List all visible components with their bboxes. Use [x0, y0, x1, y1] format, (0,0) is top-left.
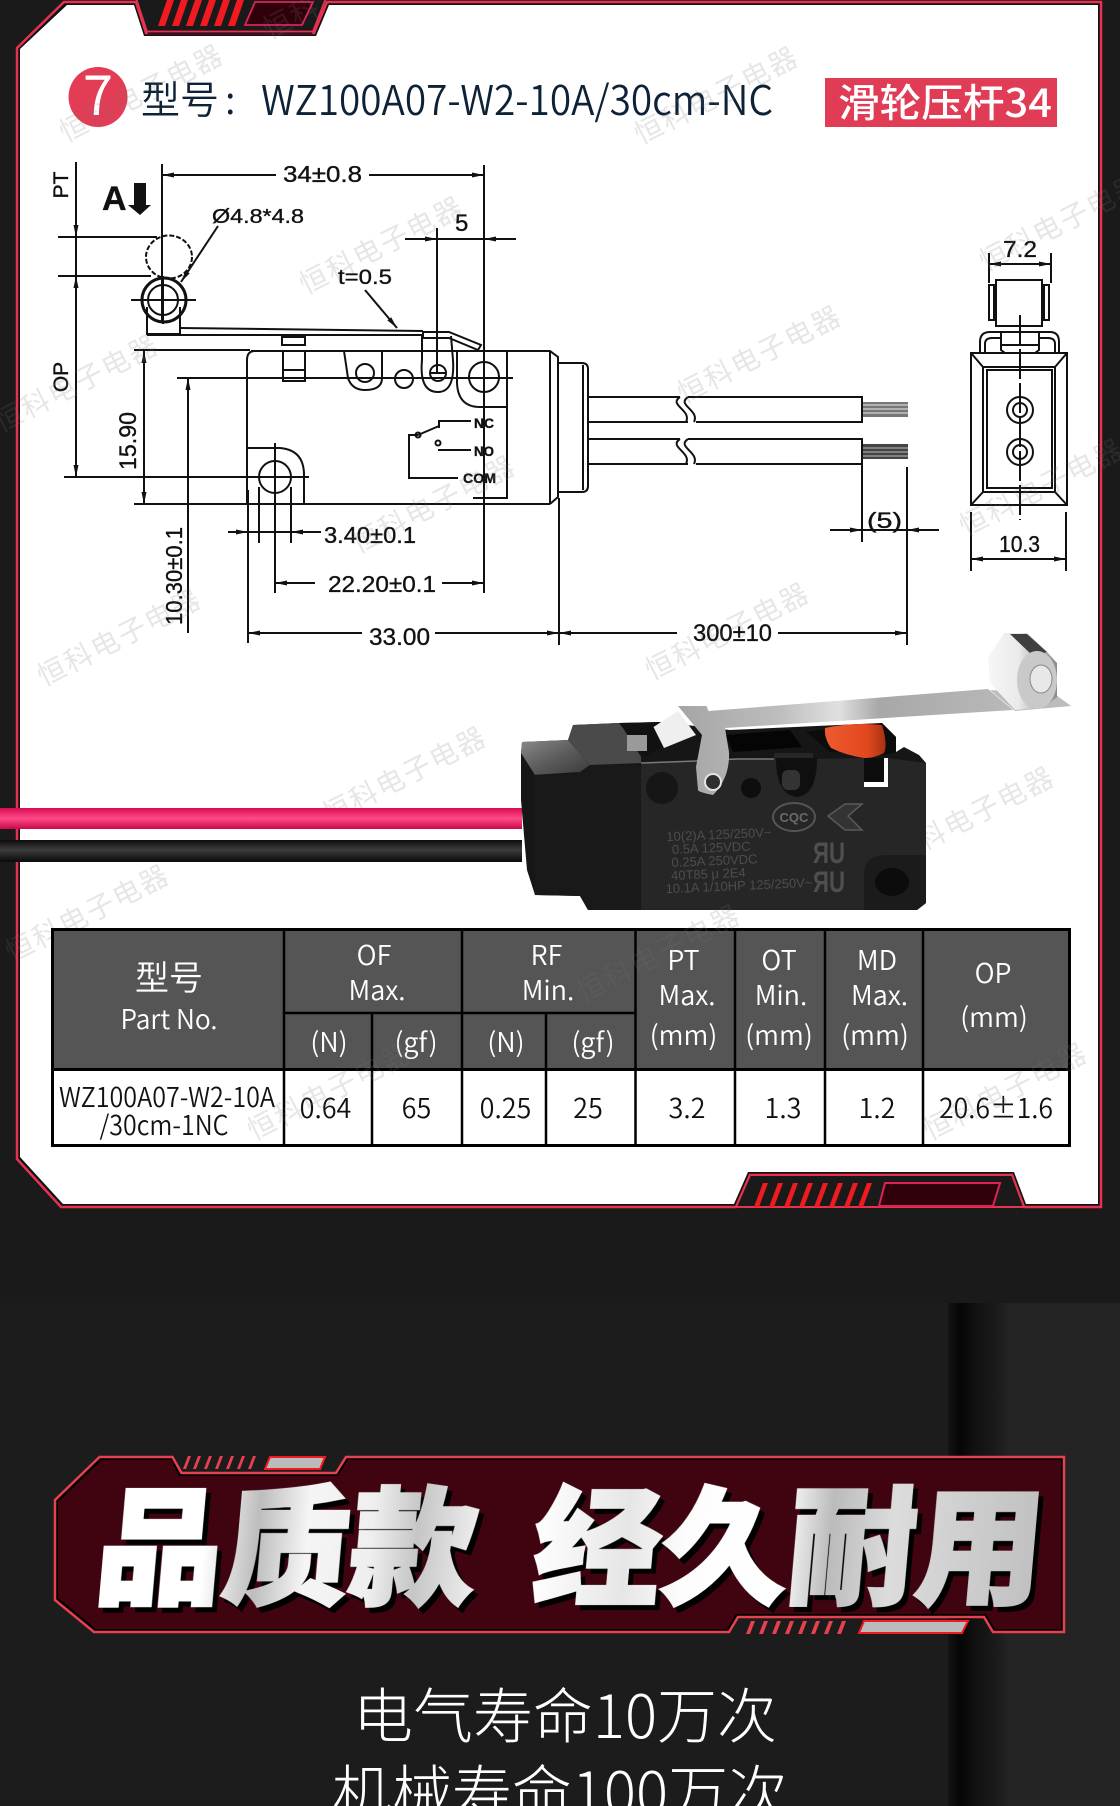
CQC mark [773, 803, 815, 831]
dimension: 10.3: 10.3 [999, 531, 1040, 557]
RF header: RF [531, 934, 562, 973]
lever pivot [705, 774, 721, 790]
wire strands [863, 402, 908, 459]
terminal labels: NC [474, 415, 494, 431]
red tag: roller lever 34: 滑轮压杆34 [838, 73, 1052, 129]
red wire [0, 808, 522, 829]
OF header [310, 934, 438, 1060]
watermarks under photo: 恒科电子电器 [627, 36, 805, 153]
data row: WZ100A07-W2-10A [59, 1076, 276, 1115]
dimension: t=0.5: t=0.5 [338, 266, 392, 289]
UR marks: ЯU [813, 837, 845, 870]
PT header: PT [667, 939, 700, 978]
dimension: 10.30±0.1: 10.30±0.1 [161, 527, 187, 625]
label: PT: PT [50, 171, 73, 198]
table grid [52, 929, 1070, 1146]
technical drawing: side view [50, 161, 939, 651]
data row [59, 1076, 1053, 1143]
EV certification mark [828, 804, 862, 830]
wires [589, 397, 862, 464]
data row: 20.6±1.6 [939, 1087, 1053, 1126]
panel: white specification frame [17, 2, 1101, 1207]
OF header: OF [357, 934, 391, 973]
dimension: 3.40±0.1: 3.40±0.1 [324, 522, 416, 548]
model text: 型号: [141, 70, 236, 126]
terminal labels [463, 415, 496, 486]
data row: 1.2 [859, 1087, 895, 1126]
banner: quality durable [55, 1445, 1064, 1634]
data row: 65 [402, 1087, 431, 1126]
part number header [120, 951, 218, 1037]
RF header: Min. [522, 969, 574, 1008]
data row: /30cm-1NC [100, 1104, 228, 1143]
watermarks under photo: 恒科电子电器 [315, 716, 493, 833]
banner frame [55, 1457, 1064, 1632]
RF header [487, 934, 615, 1060]
table body fill [51, 1069, 1071, 1147]
dimension: (5): (5) [867, 508, 902, 533]
part number header: Part No. [120, 998, 218, 1037]
RF header: (gf) [571, 1021, 615, 1060]
dimension: 22.20±0.1: 22.20±0.1 [328, 571, 436, 597]
MD header [841, 939, 909, 1053]
data row: 1.3 [765, 1087, 801, 1126]
data row: 3.2 [669, 1087, 705, 1126]
watermarks under photo: 恒科电子电器 [344, 445, 522, 562]
MD header: MD [857, 939, 897, 978]
technical drawing: end view [971, 236, 1067, 571]
watermarks under photo: 恒科电子电器 [292, 186, 470, 303]
part number header: 型号 [135, 951, 203, 1000]
terminal labels: NO [474, 443, 494, 459]
PT header: Max. [659, 974, 715, 1013]
heading: model number [68, 52, 773, 131]
electrical life: 电气寿命10万次 [353, 1669, 777, 1756]
dimension: roller diameter: Ø4.8*4.8 [212, 206, 304, 228]
OP header: OP [975, 952, 1011, 991]
OP header [960, 952, 1028, 1035]
banner title right: 经久耐用 [527, 1445, 1053, 1631]
lever bracket tip [990, 690, 1071, 711]
banner top box [265, 1457, 325, 1469]
watermarks over table: 恒科电子电器 [916, 1032, 1094, 1149]
CQC mark: CQC [780, 810, 809, 825]
dimension: 33.00: 33.00 [369, 624, 430, 651]
OT header: Min. [755, 974, 807, 1013]
OT header: OT [761, 939, 797, 978]
number badge [68, 52, 128, 131]
OP header: (mm) [960, 996, 1028, 1035]
watermarks under photo: 恒科电子电器 [52, 34, 230, 151]
rating text: 0.25A 250VDC [671, 851, 758, 870]
watermarks over table: 恒科电子电器 [240, 1032, 418, 1149]
dimension: 7.2: 7.2 [1003, 236, 1037, 262]
RF header: (N) [487, 1021, 525, 1060]
number badge: 7 [83, 52, 113, 131]
lower section background [0, 1303, 1120, 1806]
PT header: (mm) [650, 1014, 717, 1053]
watermarks under photo: 恒科电子电器 [638, 572, 816, 689]
watermarks under photo: 恒科电子电器 [670, 295, 848, 412]
dimension: 300±10: 300±10 [693, 620, 772, 647]
black wire [0, 840, 522, 862]
steel lever arm [678, 689, 1013, 795]
white plunger [654, 711, 696, 748]
dimension: 5: 5 [455, 210, 468, 237]
dimension: 15.90: 15.90 [115, 412, 142, 470]
watermarks over table [240, 894, 1094, 1149]
top tab decoration [136, 0, 327, 34]
rating text: 10(2)A 125/250V~ [666, 825, 772, 844]
table header fill [51, 928, 1071, 1069]
label and arrow: A: A [102, 180, 127, 218]
watermarks under photo: 恒科电子电器 [883, 756, 1061, 873]
roller [988, 633, 1057, 710]
rating text: 0.5A 125VDC [672, 839, 751, 857]
rating text: 10.1A 1/10HP 125/250V~ [665, 875, 813, 896]
watermarks under photo [0, 0, 1120, 971]
OF header: Max. [349, 969, 405, 1008]
switch housing [521, 722, 926, 910]
MD header: (mm) [841, 1014, 909, 1053]
OT header: (mm) [745, 1014, 813, 1053]
data row: 0.25 [480, 1087, 531, 1126]
orange actuator [825, 724, 886, 758]
label: OP: OP [50, 362, 73, 392]
OT header [745, 939, 813, 1053]
banner title left: 品质款 [90, 1445, 486, 1631]
PT header [650, 939, 717, 1053]
terminal labels: COM [463, 470, 496, 486]
dimension: 34±0.8: 34±0.8 [283, 161, 362, 187]
banner bottom stripes [746, 1621, 846, 1634]
rating text: 40T85 μ 2E4 [671, 865, 746, 883]
UR marks: ЯU [813, 866, 845, 899]
UR marks [813, 837, 845, 899]
OF header: (gf) [394, 1021, 438, 1060]
model code: WZ100A07-W2-10A/30cm-NC [261, 67, 773, 127]
MD header: Max. [851, 974, 908, 1013]
photo: micro switch with roller lever [0, 633, 1071, 910]
page background top [0, 0, 1120, 1303]
label and arrow: A [102, 180, 151, 218]
switch outline [131, 236, 588, 504]
banner top stripes [183, 1456, 256, 1469]
bottom tab decoration [736, 1175, 1024, 1207]
specification table [51, 928, 1071, 1147]
dimension lines [58, 162, 939, 645]
watermarks over table: 恒科电子电器 [569, 894, 747, 1011]
body text: lifetime ratings [332, 1669, 788, 1806]
banner bottom box [859, 1621, 968, 1633]
watermarks under photo: 恒科电子电器 [0, 854, 176, 971]
data row: 25 [573, 1087, 603, 1126]
OF header: (N) [310, 1021, 348, 1060]
data row: 0.64 [300, 1087, 351, 1126]
watermarks under photo: 恒科电子电器 [30, 578, 208, 695]
rating text [663, 823, 813, 896]
